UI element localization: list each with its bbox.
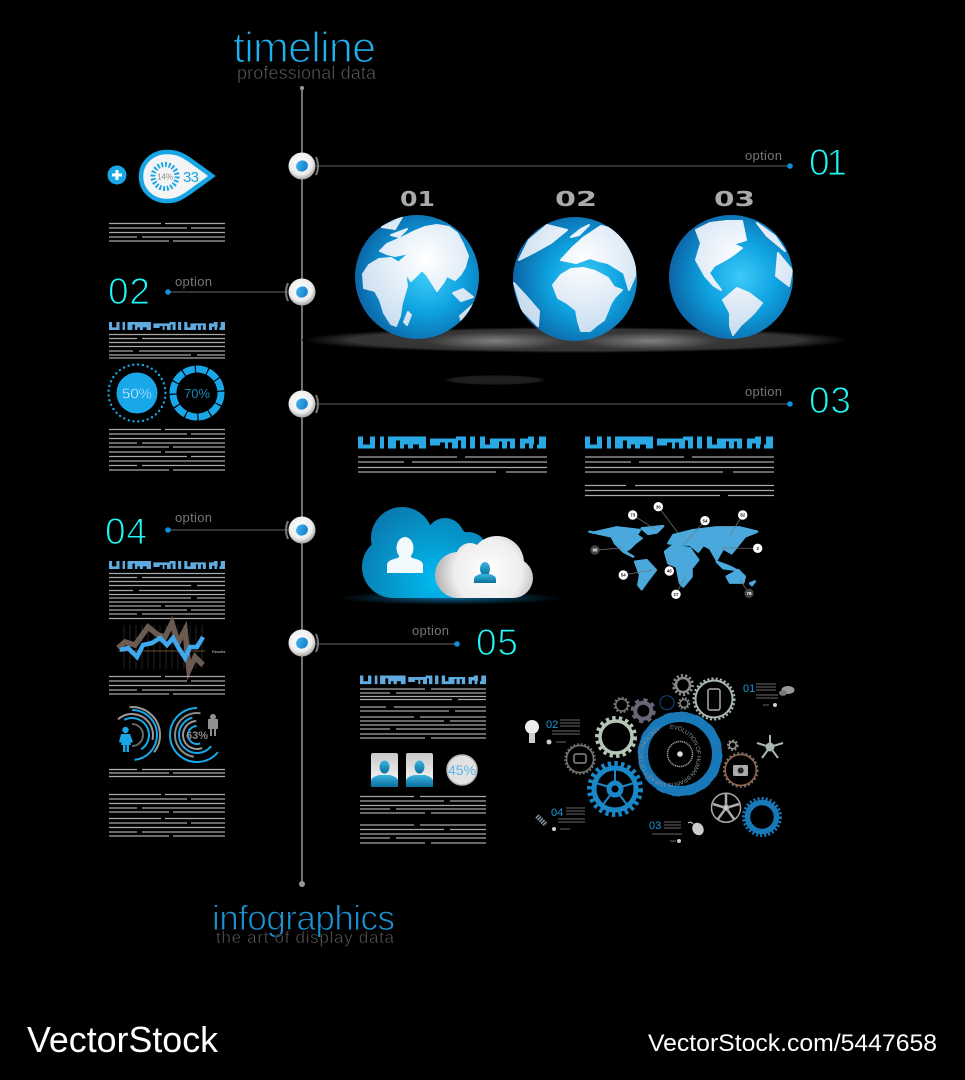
icon: white cloud with user bbox=[435, 536, 533, 598]
world map with callouts: 82 bbox=[740, 513, 746, 518]
legend 04: 04 bbox=[551, 807, 563, 819]
connector: option 04 bbox=[105, 510, 288, 552]
ring: dark blue bbox=[660, 696, 674, 710]
heading bar 02 bbox=[109, 322, 225, 330]
globe 3 bbox=[669, 215, 793, 339]
chart: 50% dial: 50% bbox=[122, 386, 152, 402]
chart: 45% badge bbox=[447, 755, 477, 785]
text block: cloud column bbox=[358, 457, 547, 472]
text block: 02 upper bbox=[109, 334, 225, 358]
gear: small top bbox=[674, 676, 692, 694]
world map with callouts: 73 bbox=[630, 513, 636, 518]
icon: lightbulb bbox=[525, 720, 539, 743]
gear: star dark bbox=[633, 700, 654, 721]
faint reflection bbox=[443, 375, 547, 385]
timeline node 4 bbox=[286, 516, 316, 544]
connector: option 03: option bbox=[745, 384, 782, 399]
icon: portrait 2 bbox=[406, 753, 433, 787]
legend 02 bbox=[546, 719, 580, 744]
watermark left: VectorStock bbox=[27, 1019, 219, 1060]
connector: option 01: option bbox=[745, 148, 782, 163]
label 01: 01 bbox=[400, 187, 435, 211]
label 03: 03 bbox=[714, 187, 755, 211]
legend 03: 03 bbox=[649, 820, 661, 832]
connector: option 03: 03 bbox=[809, 380, 851, 421]
world map with callouts: 27 bbox=[673, 592, 679, 597]
legend 04 bbox=[551, 807, 585, 831]
connector: option 03 bbox=[316, 380, 851, 421]
world map with callouts: 98 bbox=[592, 548, 598, 553]
connector: option 04: 04 bbox=[105, 511, 147, 552]
text block: 05 upper bbox=[360, 689, 486, 738]
gears cluster bbox=[525, 674, 794, 843]
heading bar 04 bbox=[109, 561, 225, 569]
closing title: infographics bbox=[212, 899, 395, 938]
icon: drop pin with 14% and 33: 14% bbox=[157, 172, 173, 182]
gear: tiny top bbox=[678, 698, 690, 709]
world map with callouts bbox=[589, 502, 762, 599]
connector: option 05 bbox=[316, 622, 518, 663]
chart: 70% segmented ring: 70% bbox=[184, 386, 210, 401]
connector: option 02 bbox=[108, 271, 288, 312]
world map with callouts: 78 bbox=[746, 591, 752, 596]
text block: intro lines bbox=[109, 224, 225, 241]
chart: male radial arcs with 63%: 63% bbox=[186, 730, 208, 742]
globe 2 bbox=[513, 217, 637, 341]
cloud glow bbox=[338, 591, 562, 605]
gear: monitor bbox=[565, 744, 595, 774]
chart: female radial arcs bbox=[102, 705, 162, 765]
ground shadow under globes bbox=[302, 327, 850, 353]
gear: wheel bbox=[712, 793, 740, 822]
title: professional data bbox=[237, 63, 377, 83]
text block: below line chart bbox=[109, 676, 225, 694]
timeline axis bbox=[299, 86, 305, 887]
heading bar: cloud column bbox=[358, 436, 546, 448]
gear: blue spoked bbox=[590, 764, 640, 814]
heading bar 05 bbox=[360, 676, 486, 684]
heading bar: map column bbox=[585, 436, 773, 448]
world map with callouts: 36 bbox=[656, 504, 661, 509]
gear: star spokes bbox=[757, 735, 783, 758]
icon: dotted diamond bbox=[537, 816, 546, 825]
connector: option 04: option bbox=[175, 510, 212, 525]
connector: option 05: option bbox=[412, 623, 449, 638]
globe 1 bbox=[355, 215, 479, 339]
chart: 50% dial bbox=[108, 364, 166, 422]
chart: line chart: Results bbox=[212, 649, 225, 654]
text block: 05 lower bbox=[360, 796, 486, 843]
gear: blue lower right bbox=[744, 799, 780, 835]
icon: drop pin with 14% and 33: 33 bbox=[183, 169, 199, 186]
icon: mouse bbox=[688, 821, 705, 837]
text block: below radial arcs bbox=[109, 770, 225, 776]
gear: tiny right bbox=[728, 740, 738, 750]
icon: plus button bbox=[108, 166, 126, 184]
gear: main blue with circular text bbox=[638, 712, 722, 796]
gear: main blue with circular text: EVOLUTION OF HUMAN BRAIN IS THE KEY OF TECHNOLOGY bbox=[638, 724, 702, 788]
chart: line chart bbox=[118, 623, 225, 670]
timeline node 3 bbox=[288, 390, 318, 418]
text block: left column bottom bbox=[109, 794, 225, 836]
icon: drop pin with 14% and 33 bbox=[141, 152, 212, 201]
legend 02: 02 bbox=[546, 719, 558, 731]
legend 03 bbox=[649, 820, 682, 843]
gear: camera bbox=[724, 753, 758, 787]
connector: option 02: option bbox=[175, 274, 212, 289]
icon: blue cloud with user bbox=[362, 507, 488, 598]
title: timeline bbox=[233, 24, 376, 72]
icon: speech bubbles bbox=[779, 686, 794, 696]
text block: map column bbox=[585, 457, 774, 496]
label 02: 02 bbox=[555, 187, 597, 211]
icon: portrait 1 bbox=[371, 753, 398, 787]
connector: option 05: 05 bbox=[476, 622, 518, 663]
watermark right: VectorStock.com/5447658 bbox=[648, 1030, 937, 1057]
connector: option 01: 01 bbox=[809, 142, 847, 183]
timeline node 5 bbox=[288, 630, 318, 656]
chart: 70% segmented ring bbox=[173, 369, 221, 417]
connector: option 01 bbox=[316, 142, 847, 183]
chart: male radial arcs with 63% bbox=[159, 697, 235, 773]
world map with callouts: 54 bbox=[702, 518, 708, 523]
world map with callouts: 2 bbox=[756, 546, 759, 551]
connector: option 02: 02 bbox=[108, 271, 150, 312]
gear: pale large bbox=[597, 718, 635, 756]
chart: 45% badge: 45% bbox=[448, 762, 476, 778]
timeline node 1 bbox=[288, 152, 318, 180]
gear: phone bbox=[694, 678, 734, 720]
gear: small left bbox=[614, 698, 629, 712]
world map with callouts: 45 bbox=[667, 569, 672, 574]
closing title: the art of display data bbox=[216, 928, 395, 947]
text block: 04 upper bbox=[109, 574, 225, 618]
world map with callouts: 54 bbox=[621, 573, 626, 578]
text block: 02 lower bbox=[109, 430, 225, 470]
timeline node 2 bbox=[286, 278, 316, 306]
legend 01 bbox=[743, 683, 778, 707]
legend 01: 01 bbox=[743, 683, 755, 695]
